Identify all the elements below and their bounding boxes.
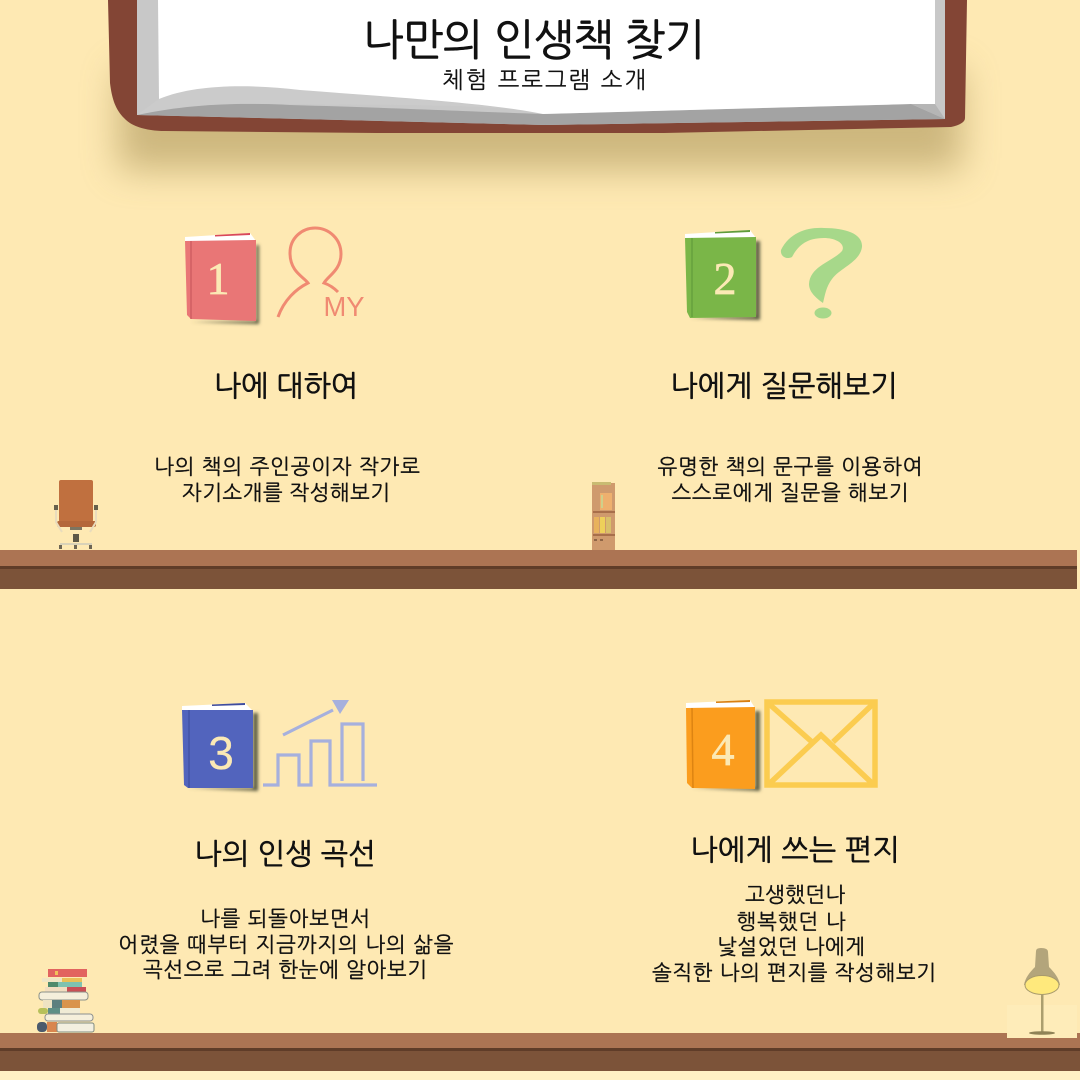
description [652, 884, 936, 985]
description: 자기소개를 작성해보기 [182, 482, 390, 505]
description: 나를 되돌아보면서 [200, 908, 370, 931]
subtitle: 체험 프로그램 소개 [442, 67, 646, 93]
heading: 나에 대하여 [214, 371, 358, 403]
heading: 나에게 질문해보기 [670, 371, 898, 403]
description: 나의 책의 주인공이자 작가로 [154, 456, 420, 479]
description: 행복했던 나 [736, 911, 846, 934]
description: 솔직한 나의 편지를 작성해보기 [652, 962, 936, 985]
icon: envelope [767, 702, 875, 785]
icon: green book 2 [685, 230, 760, 320]
description: 스스로에게 질문을 해보기 [672, 482, 908, 505]
icon: office chair [54, 480, 98, 549]
icon: red book 1 [185, 233, 259, 324]
icon: stack of books [37, 969, 94, 1032]
title: 나만의 인생책 찾기 [363, 17, 705, 65]
icon: person MY [278, 228, 365, 322]
description: 곡선으로 그려 한눈에 알아보기 [143, 959, 427, 982]
icon: growth chart [263, 700, 377, 785]
icon: bookcase [592, 482, 615, 550]
icon: desk lamp [1007, 948, 1077, 1038]
icon: question mark [781, 228, 862, 318]
open book banner [108, 0, 967, 170]
icon: person MY: MY [324, 291, 365, 322]
description [658, 456, 922, 505]
description: 낯설었던 나에게 [717, 936, 865, 959]
number 3: 3 [208, 727, 234, 779]
panel: step 3 [118, 700, 454, 982]
panel: step 4 [652, 700, 936, 985]
shelf: upper [0, 550, 1077, 589]
description [154, 456, 420, 505]
shelf: lower [0, 1033, 1080, 1080]
description [118, 908, 454, 982]
heading: 나의 인생 곡선 [194, 839, 376, 871]
icon: orange book 4 [686, 700, 760, 791]
panel: step 1 [154, 228, 420, 505]
icon: blue book 3 [182, 703, 258, 791]
description: 유명한 책의 문구를 이용하여 [658, 456, 922, 479]
panel: step 2 [658, 228, 922, 505]
number 1: 1 [206, 253, 230, 304]
description: 어렸을 때부터 지금까지의 나의 삶을 [118, 934, 454, 957]
heading: 나에게 쓰는 편지 [690, 835, 900, 867]
number 4: 4 [712, 724, 734, 775]
number 2: 2 [714, 253, 736, 304]
description: 고생했던나 [745, 884, 845, 907]
